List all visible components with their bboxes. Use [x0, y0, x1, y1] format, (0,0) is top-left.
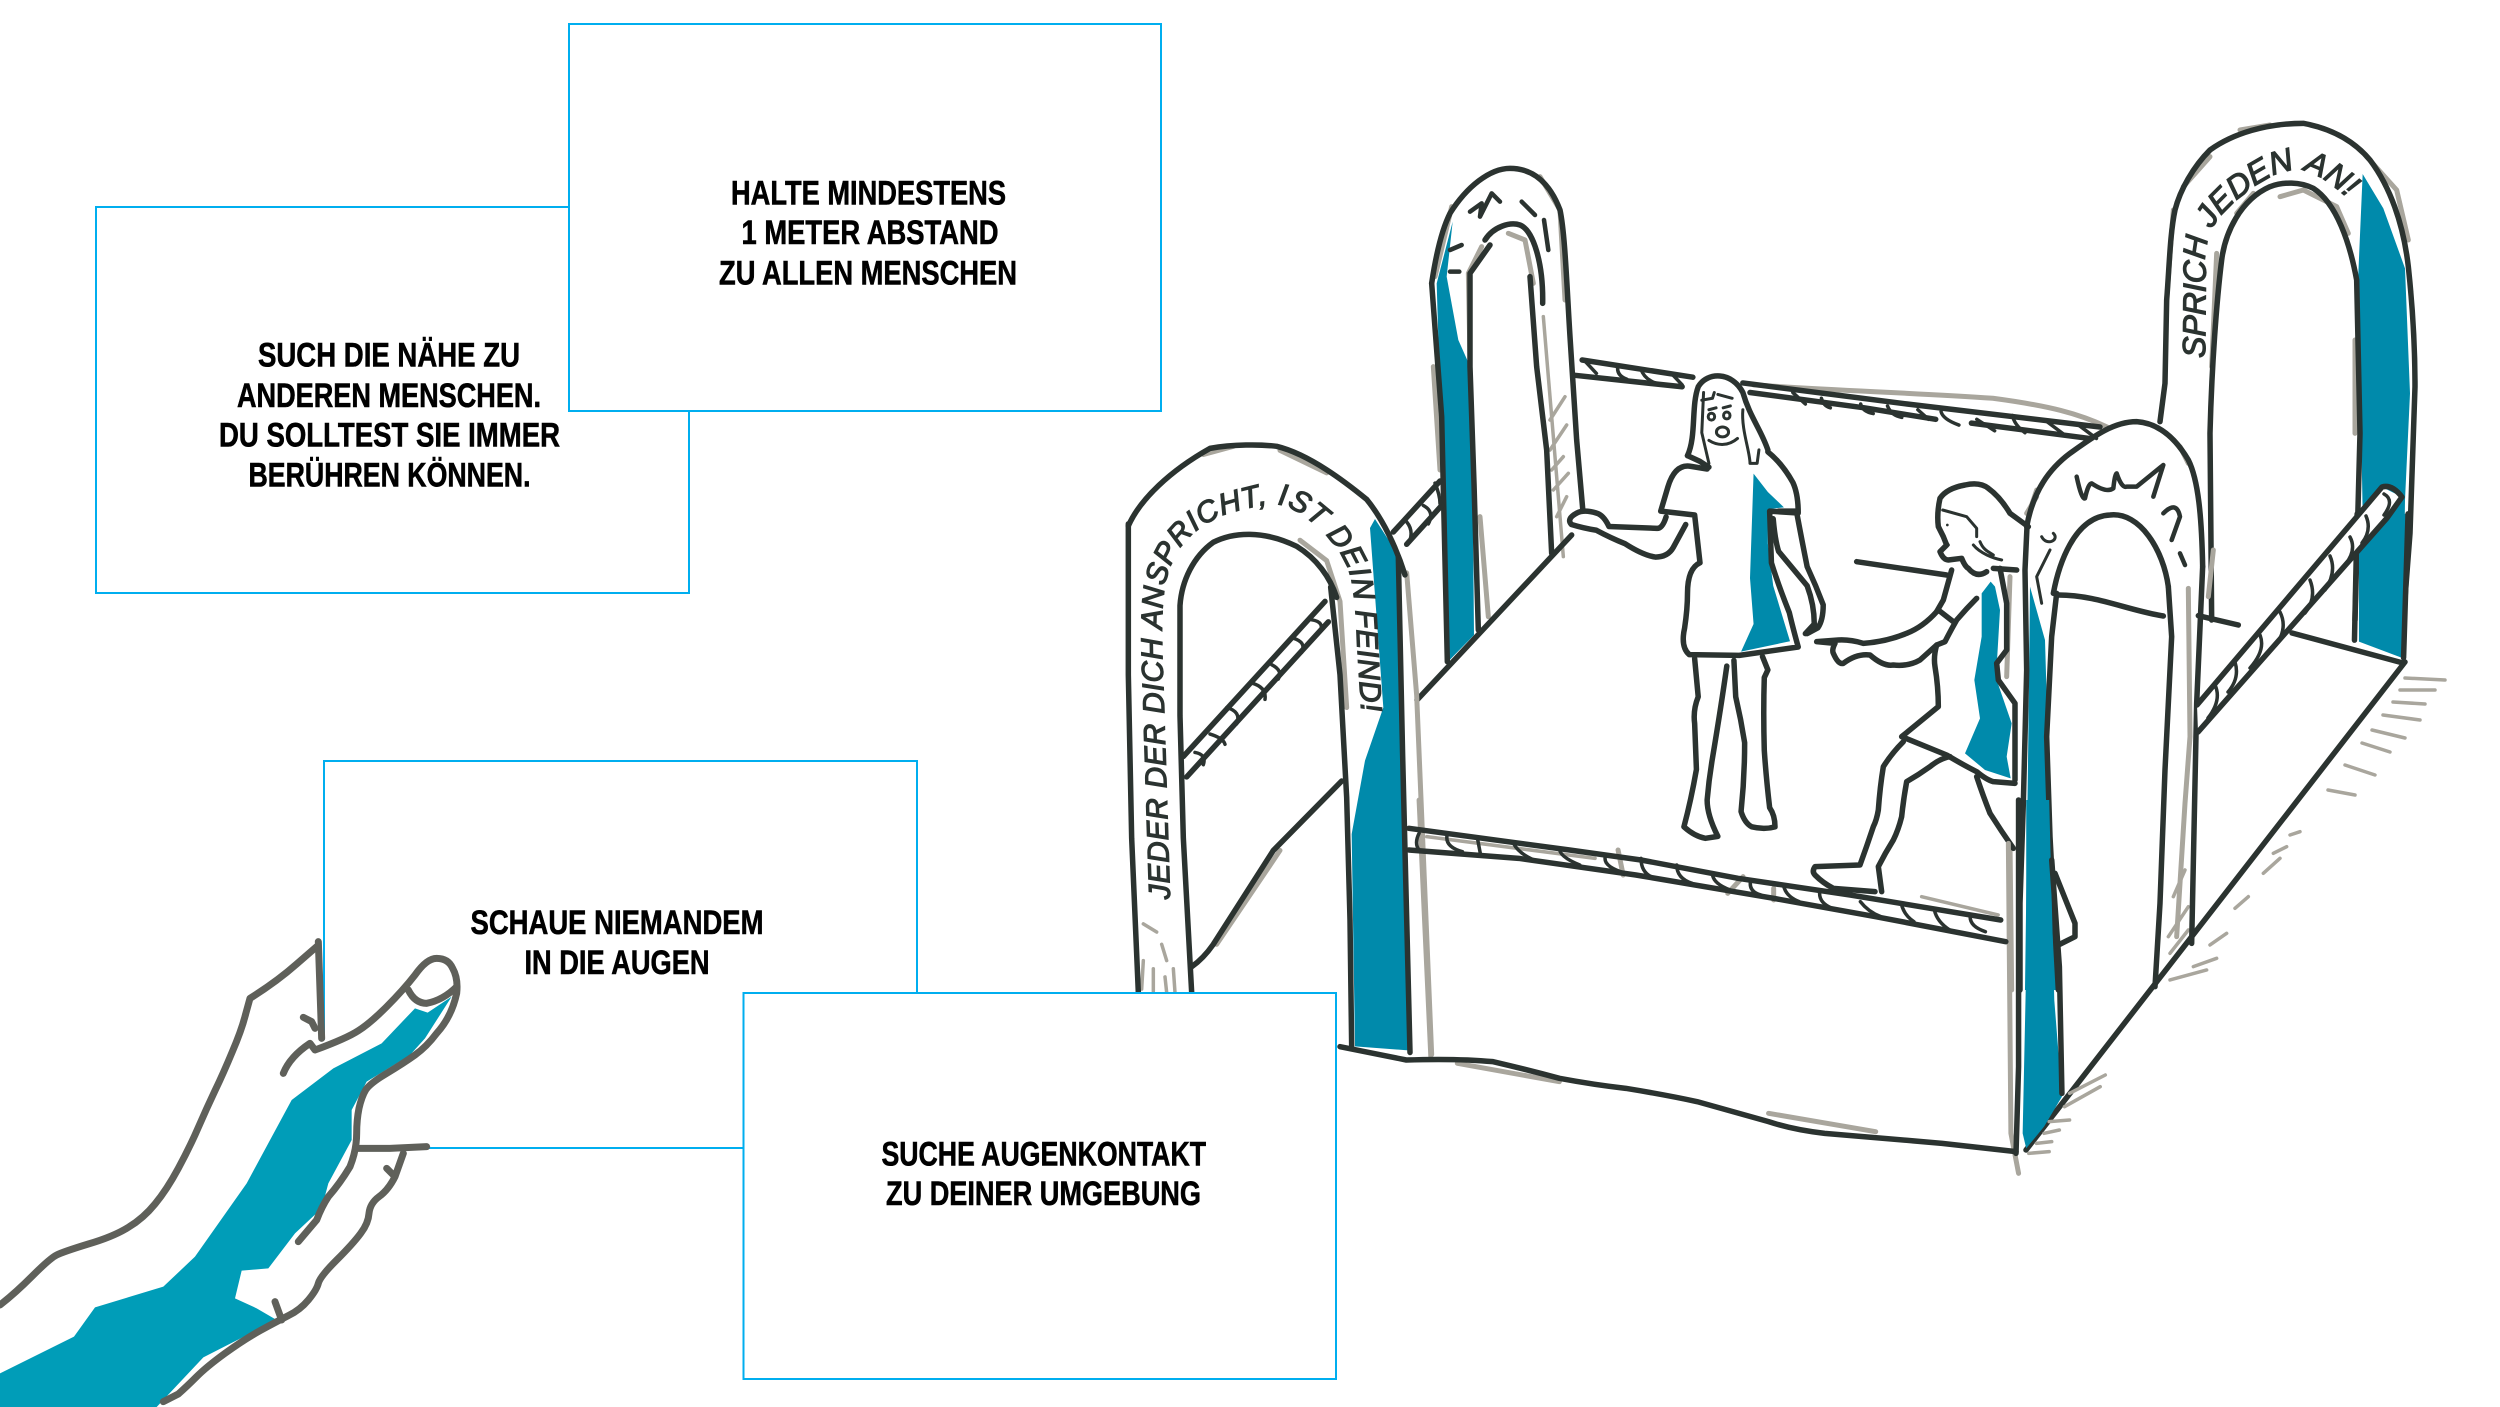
rope: left side: [1393, 481, 1442, 544]
rope: right side: [2197, 486, 2402, 732]
handwriting: jeder der dich anspricht: JEDER DER DICH ANSPRICHT, IST DEIN FEIND!: [1140, 484, 1383, 900]
arch: front right: [1857, 422, 2300, 990]
icon: hand holding card: [0, 942, 457, 1407]
card: suche augenkontakt: ZU DEINER UMGEBUNG: [886, 1175, 1201, 1213]
scribble: arch text: [2077, 465, 2185, 565]
handwriting: sprich jeden an: SPRICH JEDEN AN!: [2182, 147, 2362, 358]
card: such die Nähe: ANDEREN MENSCHEN.: [237, 377, 541, 415]
scribble: arch text: [1450, 193, 1548, 272]
arch: front left, jeder der dich anspricht: [1126, 442, 1434, 1056]
figure: girl running, pointing: [1813, 484, 2028, 892]
card: halte mindestens 1 meter abstand: 1 METER ABSTAND: [742, 214, 998, 252]
card: halte mindestens 1 meter abstand: HALTE MINDESTENS: [731, 174, 1006, 212]
card: such die Nähe: [96, 207, 689, 593]
floor: back right edge and shading: [2026, 633, 2445, 1150]
arch: back right, sprich jeden an: [2157, 120, 2418, 660]
rope: back: [1575, 360, 2107, 438]
card: halte mindestens 1 meter abstand: [569, 24, 1161, 411]
card: such die Nähe: DU SOLLTEST SIE IMMER: [219, 416, 560, 454]
card: schaue niemandem in die augen: [324, 761, 917, 1148]
card: halte mindestens 1 meter abstand: ZU ALLEN MENSCHEN: [719, 254, 1017, 292]
card: schaue niemandem in die augen: SCHAUE NIEMANDEM: [470, 904, 764, 942]
figure: girl facing forward: [1570, 376, 1823, 838]
card: such die Nähe: BERÜHREN KÖNNEN.: [248, 456, 530, 494]
card: suche augenkontakt: [744, 993, 1336, 1379]
card: such die Nähe: SUCH DIE NÄHE ZU: [258, 336, 520, 374]
card: suche augenkontakt: SUCHE AUGENKONTAKT: [882, 1136, 1206, 1174]
face: eyes and mouth: [1708, 412, 1730, 437]
illustration: inflatable ring with two girls: [1126, 120, 2447, 1176]
arch: back left: [1417, 168, 1583, 700]
card: schaue niemandem in die augen: IN DIE AUGEN: [524, 944, 710, 982]
base: front wall edge and rope: [1340, 800, 2105, 1173]
